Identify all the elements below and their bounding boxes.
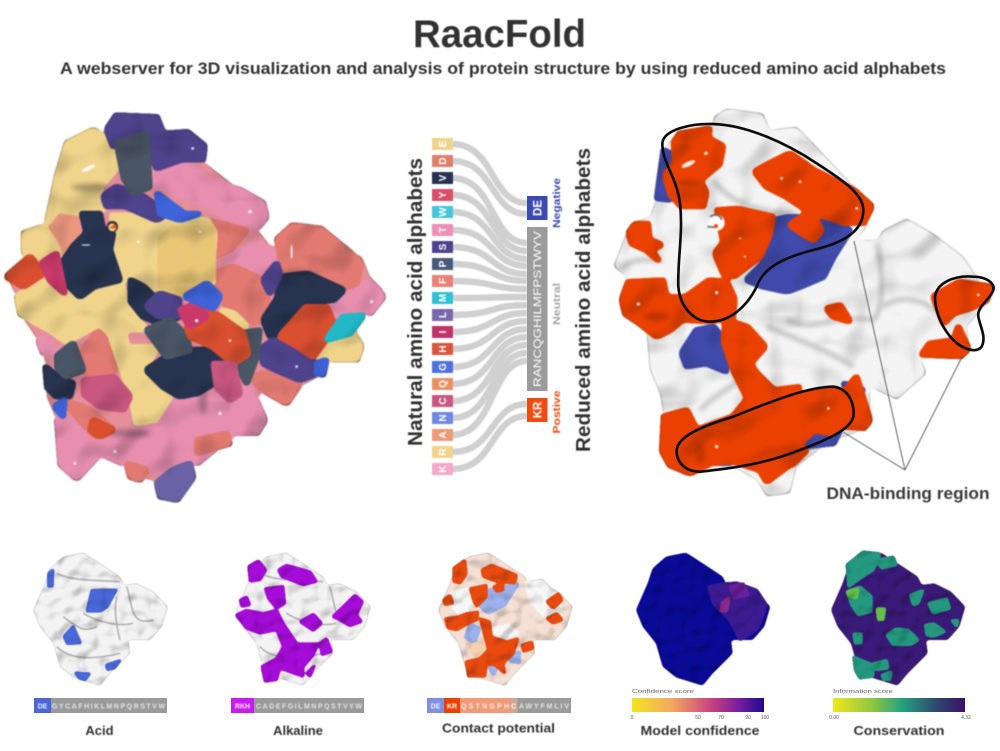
natural amino acid letters: I [438,330,449,333]
residue bar: contact potential: KR [447,704,457,710]
pink residues [38,160,383,478]
protein surface: acid [33,553,168,686]
light orange residues [45,210,90,257]
red residues [7,257,335,437]
protein surface: charge colouring [613,108,992,497]
residue bar: contact potential [427,698,571,713]
colorbar: confidence score [631,689,769,721]
protein surface: conservation [831,552,965,686]
colorbar: information score: Information score [833,689,893,695]
colorbar: confidence score: Confidence score [632,689,694,695]
subtitle: A webserver for 3D visualization and analysis of protein structure by using reduced amino acid alphabets [60,59,946,78]
natural amino acid letters: D [438,157,449,165]
outlines: DNA-binding regions [662,124,994,472]
slate residues [57,133,260,383]
flows between natural and reduced alphabets [452,144,527,469]
natural amino acid letters: V [438,174,449,181]
reduced alphabet group: neutral: RANCQGHILMFPSTWYV [532,230,544,387]
label: alkaline: Alkaline [273,723,323,738]
natural amino acid letters: G [438,363,449,371]
reduced alphabet group: negative [527,196,548,220]
label: positive: Postive [551,390,563,434]
residue bar: contact potential: QSTNGPH [461,704,509,710]
protein surface: alkaline [236,553,371,686]
residue bar: alkaline: RKH [235,704,250,710]
reduced alphabet group: neutral [527,227,548,391]
reduced alphabet group: negative: DE [532,200,544,216]
darker yellow area [160,228,213,295]
positive residues [622,128,992,482]
panel: charge coloured protein surface [613,108,994,497]
purple residues [103,115,317,380]
panel: model confidence thumbnail [631,553,770,738]
natural amino acid letters: R [438,448,449,456]
residue bar: alkaline [231,698,364,713]
protein surface: model confidence [636,553,770,686]
axis label: reduced amino acid alphabets: Reduced amino acid alphabets [572,148,595,452]
colorbar: confidence score: 0 [631,715,634,721]
reduced alphabet group: positive: KR [532,401,544,418]
navy residues [45,213,343,397]
natural amino acid letters: W [438,207,449,217]
residue bar: contact potential: C [511,704,516,710]
label: contact potential: Contact potential [442,720,555,736]
label: conservation: Conservation [854,723,945,738]
residue bar: acid [34,698,167,713]
panel: contact potential thumbnail [427,553,573,736]
colorbar: confidence score: 100 [761,715,769,721]
natural amino acid letters: P [438,260,449,267]
icon: central pocket [707,215,725,231]
natural amino acid letters: S [438,243,449,250]
icon: central pocket [107,221,118,232]
colorbar: information score [829,689,971,721]
residue bar: acid: DE [38,704,48,710]
residue bar: acid: GYCAFHIKLMNPQRSTVW [52,704,165,710]
rose residues [83,363,240,410]
callout: DNA-binding region: DNA-binding region [826,484,990,503]
natural amino acid letters: A [438,431,449,439]
natural amino acid letters: Q [438,380,449,388]
panel: natural alphabet coloured protein surface [7,115,383,500]
residue bar: contact potential: DE [431,704,441,710]
natural amino acid letters: H [438,345,449,353]
natural amino acid letters: K [438,465,449,473]
protein surface: contact potential [438,553,573,686]
natural amino acid letters: Y [438,191,449,198]
blue residues [55,193,327,417]
residue bar: contact potential: AWYFMLIV [519,704,569,710]
yellow residues [17,130,362,423]
salmon residues [63,220,362,480]
reduced alphabet group: positive [527,398,548,422]
natural amino acid letters [438,140,449,473]
colorbar: confidence score: 70 [718,715,724,721]
colorbar: confidence score: 50 [695,715,701,721]
natural amino acid letters: N [438,414,449,422]
colorbar: information score: 0.00 [829,715,839,721]
residue bar: alkaline: CADEFGILMNPQSTVYW [256,704,362,710]
negative residues [657,150,863,463]
panel: acid thumbnail [33,553,168,738]
label: model confidence: Model confidence [640,723,760,738]
colorbar: information score: 4.32 [961,715,971,721]
chart: sankey alphabet reduction [432,138,563,475]
panel: alkaline thumbnail [231,553,371,738]
natural amino acid letters: L [438,312,449,318]
axis label: natural amino acid alphabets: Natural amino acid alphabets [404,158,427,446]
natural amino acid letters: M [438,294,449,302]
natural amino acid letters: E [438,140,449,147]
natural amino acid letters: C [438,397,449,405]
label: acid: Acid [85,723,114,738]
natural amino acid letters: T [438,227,449,233]
blue-grey lobe [157,463,193,500]
magenta residues [42,253,207,327]
label: negative: Negative [551,178,563,228]
panel: conservation thumbnail [829,552,971,738]
teal residues [327,315,363,340]
callout lines to DNA-binding regions [843,241,962,470]
label: neutral: Neutral [551,283,563,325]
natural amino acid boxes [432,138,453,475]
colorbar: confidence score: 90 [745,715,751,721]
natural amino acid letters: F [438,278,449,284]
title: RaacFold [413,13,586,56]
